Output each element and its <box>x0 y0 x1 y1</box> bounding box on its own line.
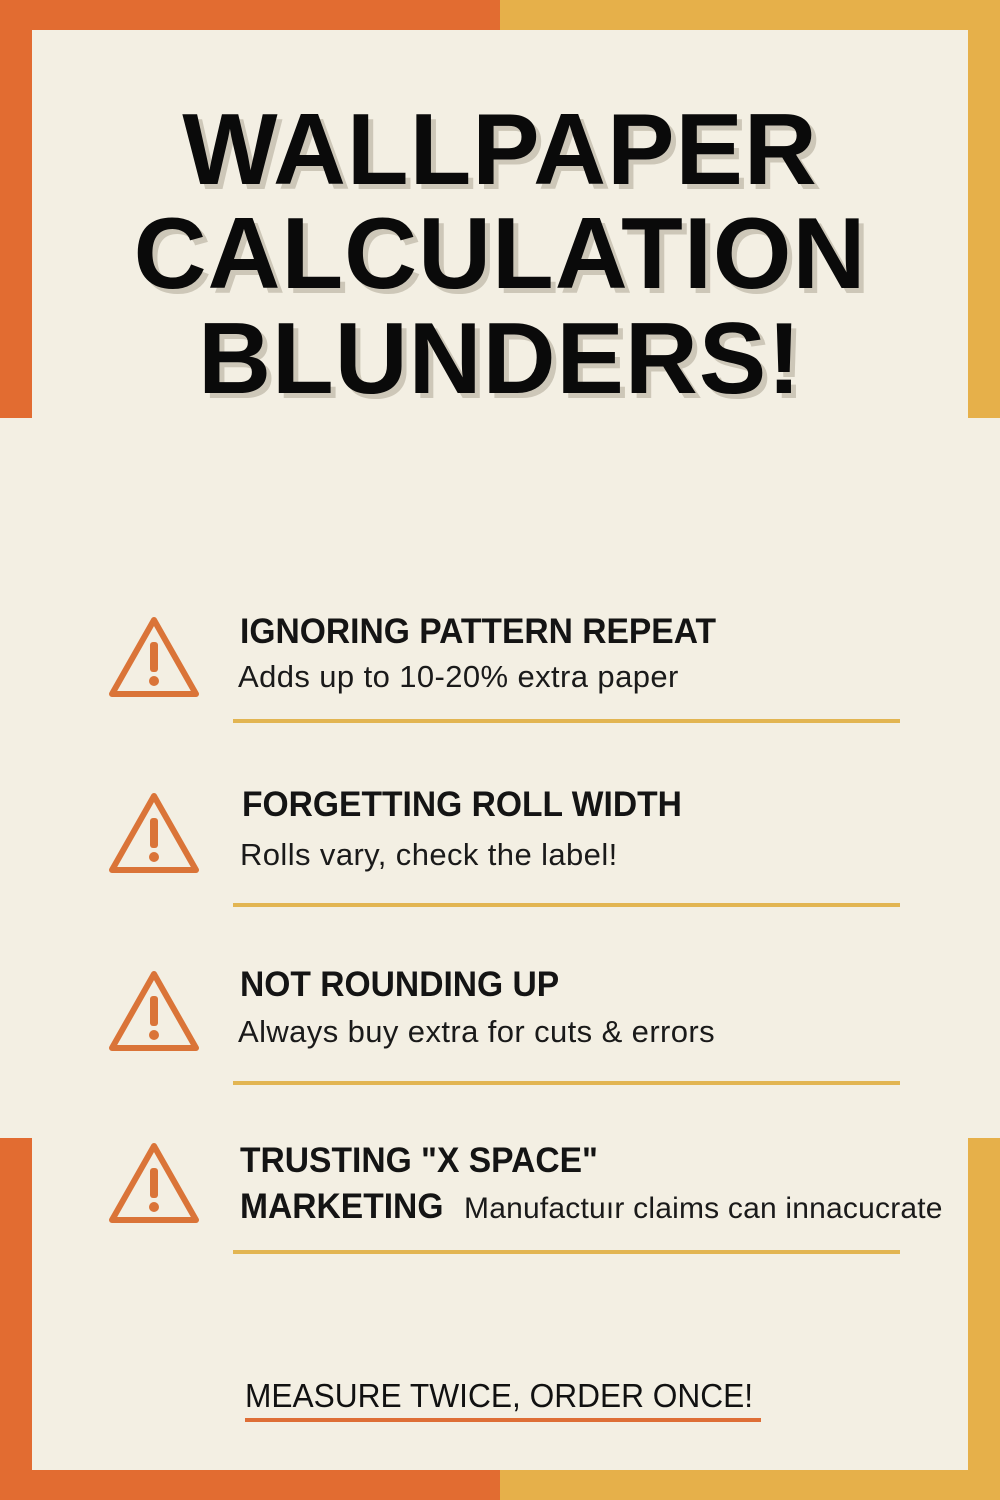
title: WALLPAPER <box>182 94 818 206</box>
title: BLUNDERS! <box>198 303 802 415</box>
heading 4 <box>240 1141 598 1226</box>
icon: warning <box>109 793 199 873</box>
heading 3: NOT ROUNDING UP <box>240 965 559 1004</box>
footer slogan: MEASURE TWICE, ORDER ONCE! <box>245 1377 753 1414</box>
subtext 1: Adds up to 10-20% extra paper <box>238 659 679 694</box>
heading 4: MARKETING <box>240 1187 443 1226</box>
heading 2: FORGETTING ROLL WIDTH <box>242 785 682 824</box>
item 1: pattern repeat <box>109 617 199 697</box>
heading 1: IGNORING PATTERN REPEAT <box>240 612 716 651</box>
subtext 3: Always buy extra for cuts & errors <box>238 1014 715 1049</box>
subtext 4: Manufactuır claims can innacucrate <box>464 1192 943 1225</box>
item 2: roll width <box>109 793 199 873</box>
title: CALCULATION <box>134 198 866 310</box>
item 4: marketing <box>109 1143 199 1223</box>
icon: warning <box>109 971 199 1051</box>
heading 4: TRUSTING "X SPACE" <box>240 1141 598 1180</box>
subtext 2: Rolls vary, check the label! <box>240 837 618 872</box>
icon: warning <box>109 1143 199 1223</box>
title <box>134 94 866 415</box>
item 3: rounding <box>109 971 199 1051</box>
icon: warning <box>109 617 199 697</box>
